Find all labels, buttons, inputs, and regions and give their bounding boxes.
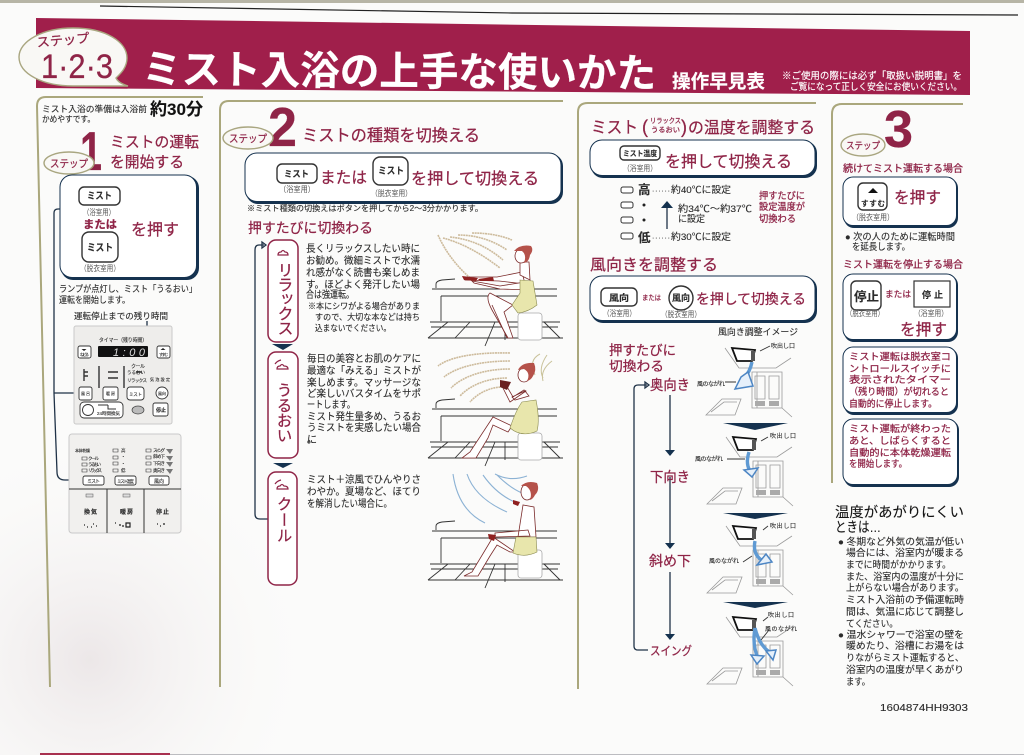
bathroom remote control: 暖房	[106, 390, 115, 396]
bathroom remote control: リラックス	[127, 378, 148, 384]
tips body: 場合には、浴室内が暖まる	[846, 547, 964, 559]
text: relax: す。ほどよく発汗したい場	[306, 278, 420, 291]
diagram: downward: 風のながれ	[695, 455, 723, 463]
temperature levels: 約40℃に設定	[671, 184, 732, 196]
bathroom remote control: 風向	[158, 390, 166, 396]
tab: relax	[268, 240, 298, 342]
temperature levels: 約34℃～約37℃	[678, 203, 753, 215]
tips heading: 温度があがりにくい	[835, 504, 964, 520]
wind cycle heading: 押すたびに	[609, 343, 676, 358]
wind button box: を押して切換える	[696, 291, 806, 307]
tips body: また、浴室内の温度が十分に	[846, 571, 964, 583]
temperature levels: ······	[652, 188, 670, 195]
tips heading: ときは…	[835, 519, 881, 535]
switch mist type box: （浴室用）	[279, 184, 315, 194]
triangle separator	[723, 423, 788, 430]
mist temperature button	[620, 146, 660, 160]
dressing room wind button: 風向	[672, 292, 690, 303]
bathroom remote control: 停止	[156, 407, 166, 414]
advance button box	[843, 177, 958, 228]
dressing room control switch: 斜め下	[153, 453, 166, 460]
switch buttons: ミスト	[87, 479, 100, 485]
bathroom remote control: ミスト	[129, 392, 142, 397]
dressing room control switch: 換気	[84, 508, 97, 516]
bathroom remote control: ねどる	[80, 351, 89, 357]
drying note: ミスト運転が終わった	[849, 423, 951, 435]
dressing room control switch: 本体乾燥	[75, 447, 90, 453]
continue heading: 続けてミスト運転する場合	[843, 162, 963, 175]
temperature levels: に設定	[678, 214, 705, 225]
triangle separator	[723, 602, 788, 608]
diagram: diagonal: 吹出し口	[770, 522, 796, 530]
temperature heading: リラックス	[650, 117, 681, 125]
illustration: cool	[428, 474, 563, 588]
temperature heading	[591, 117, 815, 137]
preparation note: ミスト入浴の準備は入浴前	[42, 103, 147, 114]
preparation note	[42, 100, 203, 124]
dressing room control switch: 奥向き	[153, 467, 165, 474]
drying note: あと、しばらくすると	[849, 436, 951, 447]
tab: moisture: うるおい	[274, 382, 292, 443]
press mist box: を押す	[131, 221, 179, 239]
dressing room stop button: 停止	[854, 289, 879, 304]
safety note: ※ご使用の際には必ず「取扱い説明書」を	[782, 70, 962, 82]
text: moisture: 毎日の美容とお肌のケアに	[307, 352, 421, 365]
diagram: downward	[695, 432, 796, 506]
temperature levels: 押すたびに	[759, 190, 805, 202]
text: moisture: ートします。	[307, 399, 355, 411]
lamp description: 運転停止までの残り時間	[74, 311, 168, 321]
dressing room button: ミスト	[378, 166, 404, 177]
diagram: back direction: 吹出し口	[771, 342, 795, 350]
wind direction cycle line	[634, 382, 670, 650]
preparation note: かめやすです。	[42, 114, 95, 124]
bathroom remote control: うるおい	[127, 369, 146, 376]
tips body: 上がらない場合があります。	[846, 582, 964, 594]
panel: step 2	[220, 96, 565, 688]
switching note: ※ミスト種類の切換えはボタンを押してから2～3分かかります。	[247, 203, 483, 213]
step bubble	[19, 28, 128, 86]
auto stop note: 自動的に停止します。	[849, 398, 937, 410]
step 1 heading	[110, 134, 199, 171]
text: relax: すので、大切な本などは持ち	[315, 312, 420, 322]
dressing room control switch: スイング	[153, 447, 166, 454]
tips heading	[835, 504, 964, 535]
direction labels: 奥向き	[650, 377, 690, 393]
dressing room control switch: うるおい	[88, 461, 102, 468]
press mist box: （浴室用）	[83, 207, 115, 217]
dressing room control switch	[69, 434, 181, 533]
auto stop note	[843, 347, 958, 415]
dressing room control switch: リラックス	[88, 468, 102, 474]
press mist box	[60, 175, 199, 280]
dressing room control switch: 低	[121, 467, 126, 474]
cycle heading: 押すたびに切換わる	[248, 220, 373, 236]
text: relax: ※本にシワがよる場合がありま	[308, 301, 420, 311]
tips body: ます。	[846, 677, 870, 688]
stop button box: または	[885, 289, 911, 299]
tips body: てください。	[846, 619, 898, 630]
panel: step 1	[37, 97, 208, 687]
auto stop note: ントロールスイッチに	[849, 364, 951, 375]
temperature levels: 低	[638, 230, 651, 245]
dressing room control switch: ・	[121, 461, 126, 466]
illustration: relax	[428, 233, 563, 346]
drying note: を開始します。	[849, 458, 907, 470]
arrow: moisture to cool	[273, 463, 293, 468]
wind cycle heading	[609, 343, 676, 374]
direction labels	[649, 377, 692, 658]
auto stop note: ミスト運転は脱衣室コ	[849, 351, 951, 363]
panel: step 3	[832, 101, 965, 487]
step label bubble: ステップ	[229, 133, 267, 145]
diagram: diagonal	[707, 522, 796, 595]
step number 2: 2	[268, 96, 297, 158]
temperature heading: (	[642, 117, 648, 137]
dressing room control switch: クール	[88, 456, 100, 462]
step bubble: 1·2·3	[41, 48, 113, 86]
switch mist type box: （脱衣室用）	[371, 188, 412, 198]
tips body: までに時間がかかります。	[846, 559, 951, 571]
text: relax: 合は強運転。	[306, 288, 354, 301]
text: moisture: 楽しめます。マッサージな	[307, 376, 421, 389]
advance button box: を押す	[894, 189, 941, 207]
text: moisture: 最適な「みえる」ミストが	[307, 364, 421, 377]
bath mist button: ミスト	[87, 191, 112, 202]
dressing room control switch: ・	[121, 454, 126, 459]
wind button box	[590, 276, 817, 323]
wind direction heading: 風向きを調整する	[590, 256, 718, 274]
dressing room control switch: 高	[121, 447, 126, 454]
diagram: swing	[707, 611, 797, 686]
extension note: を延長します。	[852, 241, 910, 253]
dressing room control switch: 下向き	[153, 460, 165, 467]
bathroom remote control: 気泡設定	[150, 376, 170, 382]
wind button box: （浴室用）	[603, 308, 636, 318]
subtitle: 操作早見表	[672, 71, 765, 92]
triangle separator	[723, 513, 788, 519]
panel: temperature and wind direction	[578, 102, 818, 690]
advance button box: （脱衣室用）	[852, 212, 894, 222]
stop button box: （脱衣室用）	[846, 308, 884, 318]
step 1 heading: を開始する	[110, 154, 184, 171]
bathroom remote control: 風呂	[81, 391, 90, 396]
title banner	[19, 18, 970, 96]
temperature button box	[590, 140, 817, 178]
direction labels: 下向き	[650, 469, 690, 485]
advance button: すすむ	[861, 199, 886, 208]
lamp description	[59, 283, 197, 321]
text: moisture: ミスト発生量多め、うるお	[307, 410, 421, 423]
dressing room mist button: ミスト	[87, 242, 113, 254]
wind image caption: 風向き調整イメージ	[718, 326, 798, 337]
wind button box: または	[642, 294, 661, 302]
switch mist type box: を押して切換える	[411, 170, 539, 188]
tips body: ● 冬期など外気の気温が低い	[838, 536, 964, 548]
tab: cool: クール	[274, 496, 292, 543]
step label bubble	[44, 152, 94, 174]
tab: moisture	[268, 352, 298, 458]
step 1 heading: ミストの運転	[110, 134, 199, 151]
auto stop note: （残り時間）が切れると	[849, 386, 949, 398]
auto stop note: 表示されたタイマー	[849, 375, 951, 386]
text: relax	[306, 243, 420, 333]
extension note: ● 次の人のために運転時間	[845, 231, 955, 243]
diagram: back direction: 風のながれ	[697, 380, 725, 388]
direction labels: スイング	[650, 644, 692, 658]
step label bubble	[223, 127, 273, 149]
extension note	[845, 231, 955, 253]
step label bubble: ステップ	[846, 141, 880, 152]
press mist box: （脱衣室用）	[80, 263, 120, 273]
dressing room control switch: 停止	[156, 508, 169, 516]
step label bubble	[841, 134, 885, 156]
temperature levels: 約30℃に設定	[671, 231, 732, 243]
wind button box: （脱衣室用）	[661, 309, 701, 319]
text: relax: 込まないでください。	[315, 323, 391, 333]
switch buttons	[83, 476, 169, 485]
stop button box	[843, 274, 958, 342]
arrow up	[666, 207, 668, 229]
text: moisture: ど楽しいバスタイムをサポ	[307, 387, 421, 400]
tips body: 間は、気温に応じて調整し	[846, 606, 964, 618]
safety note: ご覧になって正しく安全にお使いください。	[790, 81, 962, 93]
temperature button box: （浴室用）	[623, 163, 657, 173]
connector lines to remote	[54, 209, 147, 480]
tips body: 浴室内の温度が早くあがり	[846, 664, 964, 676]
stop button box: （浴室用）	[914, 308, 948, 318]
tips body	[838, 536, 965, 688]
lamp description: 運転を開始します。	[59, 294, 130, 305]
step number 3: 3	[884, 101, 913, 159]
step 2 heading: ミストの種類を切換える	[302, 126, 480, 145]
mist temperature button: ミスト温度	[623, 148, 657, 158]
step label bubble: ステップ	[50, 158, 88, 170]
wind cycle heading: 切換わる	[609, 359, 664, 374]
switch mist type box	[245, 153, 563, 204]
paper shading	[0, 400, 340, 755]
dressing room control switch: 暖房	[120, 508, 133, 516]
text: relax: 長くリラックスしたい時に	[306, 243, 420, 255]
drying note: 自動的に本体乾燥運転	[849, 447, 952, 459]
tab: relax: リラックス	[274, 262, 292, 336]
stop button box: を押す	[900, 321, 947, 339]
temperature button box: を押して切換える	[665, 153, 792, 171]
text: relax: れ感がなく読書も楽しめま	[306, 266, 420, 279]
illustration: moisture	[428, 353, 563, 466]
text: moisture: うミストを実感したい場合	[307, 421, 421, 434]
tips body: ミスト入浴前の予備運転時	[846, 594, 965, 606]
bath stop button: 停止	[922, 289, 943, 300]
text: cool	[307, 474, 421, 510]
switch mist type box: または	[320, 169, 367, 187]
direction labels: 斜め下	[649, 553, 691, 569]
tips body: りながらミスト運転すると、	[846, 652, 964, 664]
temperature levels: 切換わる	[759, 213, 796, 225]
bathroom remote control: 24時間換気	[97, 410, 120, 417]
temperature levels: 高	[638, 182, 651, 197]
stop heading: ミスト運転を停止する場合	[843, 258, 963, 271]
switch buttons: ミスト温度	[117, 478, 134, 485]
diagram: back direction	[697, 342, 795, 417]
bath button: ミスト	[284, 169, 309, 179]
temperature heading: の温度を調整する	[688, 119, 815, 137]
tab: cool	[268, 472, 297, 585]
timer display: 1:00	[113, 347, 146, 359]
text: moisture: に。	[307, 434, 317, 446]
bath wind button: 風向	[609, 292, 629, 303]
bath button	[277, 164, 317, 183]
arrow: relax to moisture	[272, 344, 293, 350]
temperature levels: ······	[652, 235, 670, 242]
tips body: 暖めたり、浴槽にお湯をは	[846, 640, 965, 652]
text: cool: わやか。夏場など、ほてり	[307, 485, 421, 498]
drying note	[843, 419, 959, 487]
diagram: downward: 吹出し口	[770, 432, 796, 440]
temperature heading: )	[681, 117, 687, 137]
bathroom remote control: すすむ	[159, 351, 168, 357]
cycle arrow	[255, 242, 268, 519]
text: cool: を解消したい場合に。	[307, 497, 392, 510]
temperature heading: うるおい	[651, 126, 680, 134]
bathroom remote control	[74, 326, 172, 424]
temperature heading: ミスト	[591, 119, 638, 137]
diagram: swing: 吹出し口	[768, 611, 794, 619]
text: cool: ミスト＋涼風でひんやりさ	[307, 474, 421, 486]
diagram: diagonal: 風のながれ	[709, 557, 739, 565]
temperature levels	[621, 182, 805, 245]
preparation note: 約30分	[150, 100, 203, 119]
press mist box: または	[83, 218, 117, 231]
dressing room wind button	[669, 286, 693, 310]
lamp description: ランプが点灯し、ミスト「うるおい」	[59, 283, 197, 294]
product code: 1604874HH9303	[880, 702, 968, 714]
step bubble: ステップ	[36, 30, 90, 50]
temperature tips	[835, 504, 965, 688]
tips body: ● 温水シャワーで浴室の壁を	[838, 629, 964, 641]
bathroom remote control: クール	[131, 364, 145, 370]
text: moisture	[307, 352, 421, 446]
temperature levels: 設定温度が	[759, 201, 805, 213]
text: relax: お勧め。微細ミストで水濡	[306, 254, 420, 267]
bathroom remote control: タイマー（残り時間）	[99, 336, 147, 344]
diagram: swing: 風のながれ	[765, 625, 797, 633]
bath wind button	[601, 288, 637, 306]
main title: ミスト入浴の上手な使いかた	[142, 48, 656, 96]
safety note	[782, 70, 962, 93]
switch buttons: 風向	[154, 478, 164, 485]
arrowheads	[665, 450, 675, 640]
dressing room button	[373, 157, 408, 185]
step number 1: 1	[80, 120, 102, 182]
